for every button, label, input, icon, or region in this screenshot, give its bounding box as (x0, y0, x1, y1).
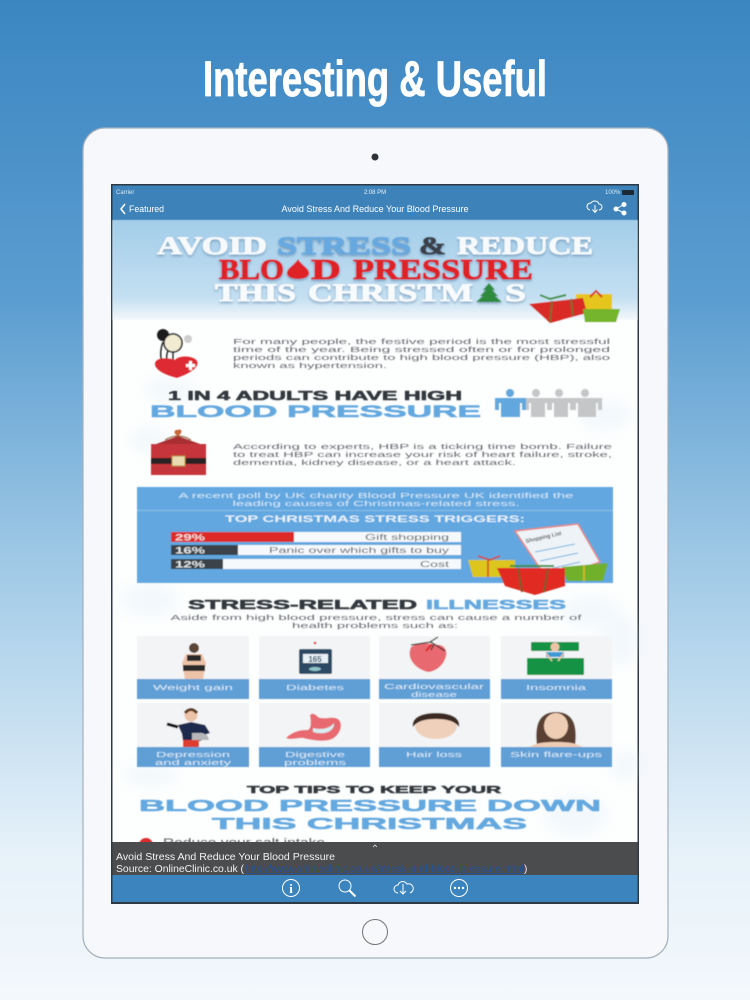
heading: this christmas (215, 280, 526, 307)
bar: cost: 12% (175, 560, 205, 570)
tip: reduce salt intake: Reduce your salt intake (163, 837, 325, 849)
icon: cloud download (587, 201, 602, 212)
app navigation bar: 100% (605, 190, 621, 196)
intro text: known as hypertension. (233, 361, 387, 370)
caption overlay: http://www.onlineclinic.co.uk/stress-and-blood-pressure.html (245, 864, 524, 875)
card: diabetes: Diabetes (286, 683, 344, 692)
caption source: Source: OnlineClinic.co.uk ( (116, 864, 245, 875)
intro text: periods can contribute to high blood pressure (HBP), also (233, 353, 610, 362)
heading: stress-related illnesses: STRESS-RELATED (188, 598, 417, 612)
gifts illustration (529, 291, 620, 323)
back link (121, 204, 125, 214)
heading: top tips: BLOOD PRESSURE DOWN (139, 798, 601, 815)
app navigation bar (112, 186, 638, 220)
icon: info (282, 880, 300, 896)
heading: avoid stress: AVOID (157, 233, 267, 260)
panel: stress triggers: leading causes of Christmas-related stress. (232, 499, 520, 508)
icon: woman (182, 643, 206, 679)
heading: blood pressure (219, 254, 533, 286)
bar: gift shopping: 29% (175, 532, 205, 542)
heading: blood pressure: PRESSURE (353, 254, 533, 286)
intro text: time of the year. Being stressed often or for prolonged (233, 345, 610, 354)
heading: 1 in 4 adults: 1 IN 4 ADULTS HAVE HIGH (168, 389, 462, 403)
card: cardiovascular disease: Cardiovascular (384, 682, 485, 691)
heading: blood pressure: BLO (219, 254, 284, 286)
body text: ticking time bomb: According to experts, HBP is a ticking time bomb. Failure (233, 442, 612, 451)
card: diabetes (259, 636, 370, 699)
card: insomnia: Insomnia (526, 683, 587, 692)
heading: top tips: THIS CHRISTMAS (212, 816, 528, 833)
nav title: Avoid Stress And Reduce Your Blood Pressure (282, 204, 468, 214)
icon: heart (410, 637, 446, 672)
icon: info: i (289, 881, 293, 896)
bar: cost (171, 559, 461, 570)
heading: this christmas: S (505, 280, 526, 307)
poll text: A recent poll by UK charity Blood Pressure UK identified the (178, 491, 574, 500)
intro text: illnesses (170, 613, 583, 630)
icon: blood drop (287, 259, 309, 279)
heading: 1 in 4 adults (150, 389, 481, 421)
card: depression and anxiety (137, 703, 249, 767)
infographic content (112, 220, 640, 852)
body text: ticking time bomb (233, 442, 612, 467)
card: depression and anxiety: and anxiety (155, 758, 231, 767)
heading: avoid stress (157, 233, 593, 260)
card: insomnia (501, 636, 612, 699)
heading: avoid stress: & (419, 233, 446, 260)
home button (362, 920, 388, 944)
app navigation bar: Featured (129, 204, 164, 214)
card: digestive problems: Digestive (285, 750, 345, 759)
card: digestive problems: problems (284, 758, 346, 767)
caption overlay: ) (524, 864, 527, 875)
card: skin flare-ups: Skin flare-ups (510, 750, 602, 759)
bar: cost: Cost (420, 560, 450, 569)
caption title: Avoid Stress And Reduce Your Blood Pressure (116, 852, 335, 863)
card: cardiovascular disease: disease (411, 690, 457, 699)
bar: panic over gifts: 16% (175, 546, 205, 556)
heading: blood pressure: D (311, 254, 341, 286)
tablet frame (83, 128, 668, 958)
icon: stomach (286, 714, 341, 741)
icon: glucose meter: 165 (308, 655, 322, 664)
shopping list illustration: Shopping List (525, 531, 562, 545)
card: hair loss: Hair loss (406, 750, 462, 759)
icon: bald head (413, 713, 459, 739)
overlay handle (373, 845, 377, 847)
icon: more (450, 880, 468, 896)
tip: reduce salt intake (139, 837, 325, 852)
heading: this christmas: CHRISTM (308, 280, 473, 307)
intro text: For many people, the festive period is the most stressful (233, 337, 611, 346)
card: cardiovascular disease (379, 636, 490, 699)
bar: panic over gifts (171, 545, 461, 556)
icon: person in bed (527, 642, 584, 675)
gifts illustration (468, 556, 608, 595)
heading: top tips: TOP TIPS TO KEEP YOUR (247, 785, 503, 796)
heading: stress-related illnesses: ILLNESSES (426, 598, 566, 612)
camera (372, 154, 378, 160)
caption overlay (112, 842, 638, 875)
snowflake patterns (122, 378, 640, 835)
body text: ticking time bomb: dementia, kidney disease, or a heart attack. (233, 458, 516, 467)
panel: stress triggers (137, 487, 613, 595)
screen (111, 184, 639, 904)
pictogram: 1 in 4 people (495, 389, 602, 417)
bottom toolbar (112, 875, 638, 902)
bar: gift shopping (171, 532, 461, 542)
heading: 1 in 4 adults: BLOOD PRESSURE (150, 403, 481, 421)
heading: avoid stress: STRESS (277, 233, 411, 260)
intro text: illnesses: health problems such as: (292, 621, 458, 630)
icon: christmas tree (476, 283, 502, 302)
icon: search (339, 880, 356, 896)
shopping list illustration (515, 524, 600, 580)
card: hair loss (379, 703, 490, 767)
title: Interesting & Useful (203, 51, 547, 107)
heading: avoid stress: REDUCE (457, 233, 593, 260)
card: weight gain: Weight gain (153, 683, 233, 692)
heading: top tips (139, 785, 601, 833)
icon: cloud download (394, 882, 413, 894)
icon: worried man (167, 708, 210, 747)
status bar text: Carrier (116, 190, 134, 196)
app navigation bar: 2:08 PM (364, 190, 386, 196)
intro text: illnesses: Aside from high blood pressure, stress can cause a number of (170, 613, 583, 622)
card: depression and anxiety: Depression (156, 750, 230, 759)
card: skin flare-ups (501, 703, 612, 767)
icon: dynamite present bomb (151, 429, 206, 475)
card: digestive problems (259, 703, 370, 767)
intro text (233, 337, 611, 370)
body text: ticking time bomb: to treat HBP can increase your risk of heart failure, stroke, (233, 450, 612, 459)
icon: share (614, 202, 626, 215)
icon: blood pressure gauge and heart (155, 329, 198, 378)
bar: panic over gifts: Panic over which gifts to buy (269, 546, 449, 555)
card: weight gain (137, 636, 249, 699)
panel heading: TOP CHRISTMAS STRESS TRIGGERS: (225, 514, 525, 524)
icon: woman face (530, 712, 582, 747)
bar: gift shopping: Gift shopping (365, 533, 449, 542)
heading: stress-related illnesses (188, 598, 566, 612)
header sky (112, 220, 638, 320)
heading: this christmas: THIS (215, 280, 296, 307)
